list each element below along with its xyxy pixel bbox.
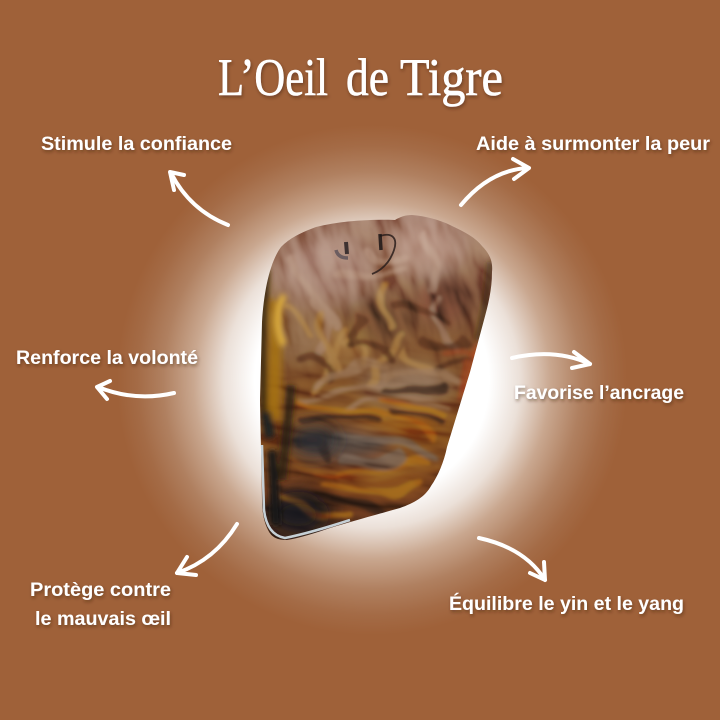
arrow: Stimule la confiance [170, 172, 228, 225]
arrow: Favorise l'ancrage [512, 352, 590, 368]
dark patches [272, 424, 336, 533]
title: L’Oeil [218, 49, 328, 107]
label: Aide à surmonter la peur: Aide à surmonter la peur [476, 134, 711, 155]
title: Tigre [400, 49, 503, 107]
pale edge [262, 445, 350, 538]
arrow: Renforce la volonté [97, 381, 174, 399]
label: Protège contre le mauvais œil: Protège contre [30, 580, 171, 601]
label: Équilibre le yin et le yang: Équilibre le yin et le yang [449, 593, 684, 615]
label: Protège contre le mauvais œil: le mauvais œil [35, 609, 171, 630]
label: Favorise l'ancrage: Favorise l’ancrage [514, 383, 684, 404]
label: Renforce la volonté: Renforce la volonté [16, 348, 198, 369]
arrow: Protège contre le mauvais œil [177, 524, 237, 575]
wispy bands [283, 235, 474, 516]
title [218, 49, 503, 107]
title: de [346, 49, 389, 107]
arrow: Aide à surmonter la peur [461, 159, 529, 205]
gemstone [260, 215, 492, 540]
soft colour zones [268, 224, 475, 532]
streak textures [260, 215, 492, 538]
eye marks [336, 234, 395, 274]
label: Protège contre le mauvais œil [30, 580, 171, 630]
arrow: Équilibre le yin et le yang [479, 538, 545, 580]
dark amber rim [263, 262, 490, 525]
label: Stimule la confiance: Stimule la confiance [41, 134, 232, 155]
darkening tone [260, 215, 492, 540]
